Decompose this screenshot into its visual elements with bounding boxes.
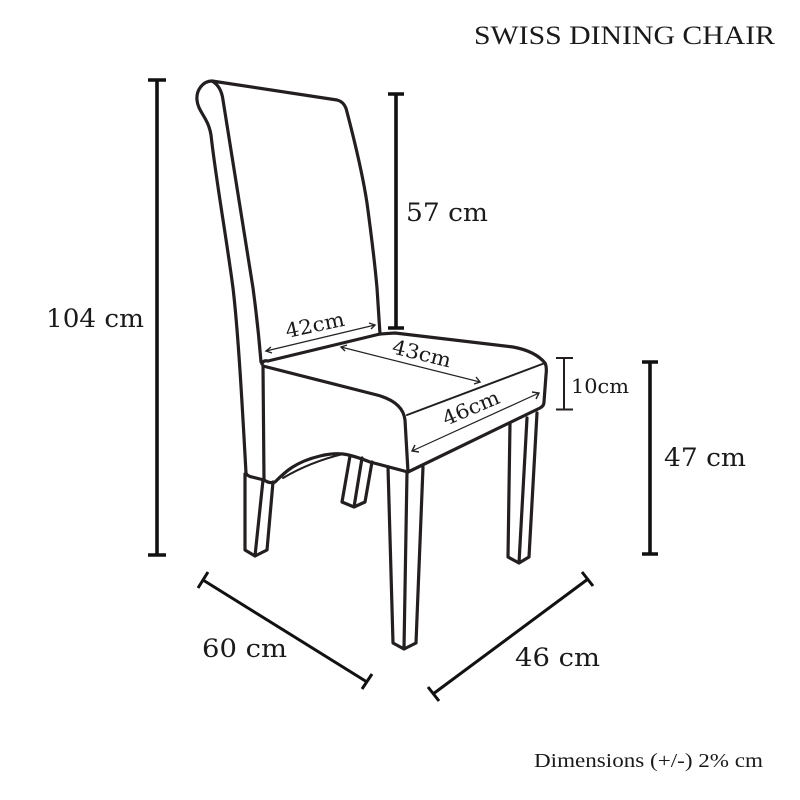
chair side panel and underside bbox=[263, 366, 408, 483]
back right leg bbox=[508, 413, 537, 563]
chair seat bbox=[263, 333, 546, 472]
rear leg bbox=[342, 456, 372, 507]
chair seat rear edge bbox=[262, 334, 380, 364]
front centre leg bbox=[388, 467, 423, 649]
label: 60 cm: 60 cm bbox=[202, 634, 287, 664]
dimension: seat thickness bbox=[556, 358, 629, 410]
chair outline bbox=[197, 81, 546, 649]
label: 42cm: 42cm bbox=[283, 307, 347, 343]
chair back side panel bbox=[197, 81, 264, 480]
chair back inner edge bbox=[212, 81, 261, 362]
footnote: Dimensions (+/-) 2% cm bbox=[534, 751, 763, 772]
dimension: overall height bbox=[46, 79, 166, 556]
underside lens bbox=[283, 454, 343, 478]
dimension: back width 42cm bbox=[266, 307, 375, 353]
label: 57 cm: 57 cm bbox=[406, 198, 488, 228]
label: 104 cm: 104 cm bbox=[46, 304, 144, 334]
dimension: width bbox=[428, 572, 600, 701]
label: 46cm: 46cm bbox=[439, 385, 503, 431]
dimension: seat depth 43cm bbox=[341, 335, 480, 384]
label: 10cm: 10cm bbox=[571, 374, 629, 398]
dimension: seat height bbox=[642, 361, 746, 555]
dimension: seat width 46cm bbox=[412, 385, 539, 452]
front left leg bbox=[245, 474, 273, 556]
label: 43cm: 43cm bbox=[390, 335, 454, 372]
title: SWISS DINING CHAIR bbox=[474, 20, 775, 50]
label: 46 cm: 46 cm bbox=[515, 643, 600, 673]
label: 47 cm: 47 cm bbox=[664, 443, 746, 473]
dimension: depth bbox=[198, 572, 372, 689]
seat front crease bbox=[407, 363, 545, 415]
chair backrest bbox=[212, 81, 380, 334]
dimension: back height bbox=[388, 93, 488, 329]
